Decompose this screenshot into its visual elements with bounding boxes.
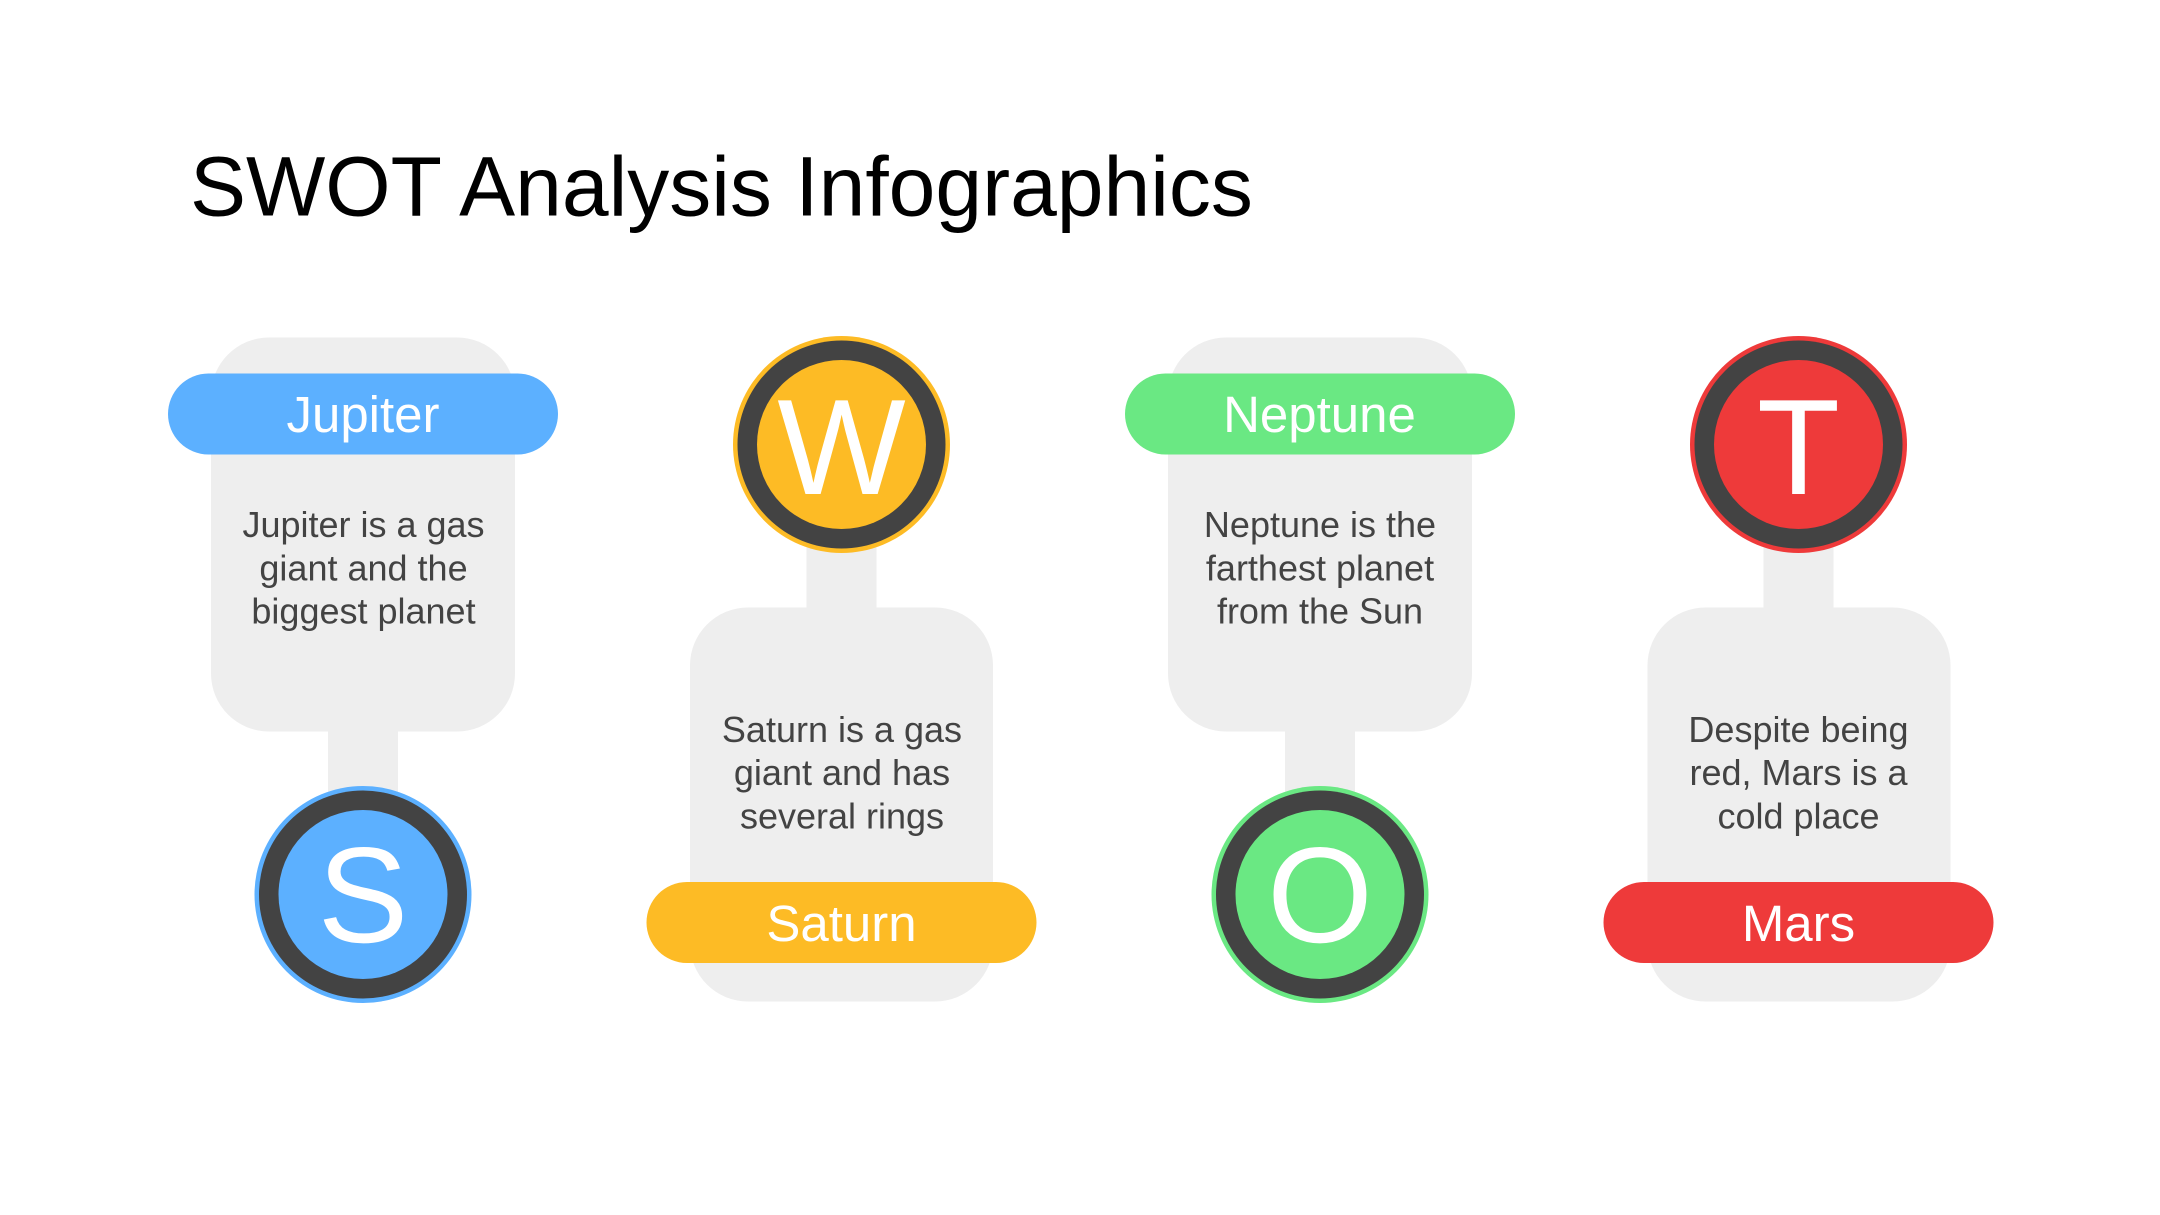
description: Neptune: Neptune is the [1204, 504, 1436, 545]
label pill: Neptune: Neptune [1223, 386, 1416, 443]
icon: letter T circle: T [1757, 371, 1840, 523]
label pill: Jupiter [168, 374, 558, 454]
icon: letter O circle [1212, 786, 1428, 1003]
description: Mars: red, Mars is a [1689, 752, 1909, 793]
label pill: Jupiter: Jupiter [286, 386, 440, 443]
icon: letter W circle: W [777, 371, 906, 523]
card: Saturn [690, 608, 993, 1002]
description: Neptune [1204, 504, 1436, 632]
card: Jupiter [211, 338, 515, 732]
icon: letter S circle [254, 786, 472, 1003]
description: Jupiter: giant and the [259, 548, 468, 588]
description: Jupiter: biggest planet [251, 590, 476, 632]
description: Jupiter [242, 504, 485, 632]
description: Saturn: giant and has [734, 752, 950, 793]
connector: T to Mars [1764, 542, 1834, 612]
panel: T Mars [1604, 336, 1994, 1002]
description: Mars: cold place [1717, 796, 1880, 836]
panel: W Saturn [646, 336, 1036, 1002]
panel: O Neptune [1125, 338, 1515, 1003]
description: Saturn [722, 709, 962, 836]
icon: letter S circle: S [318, 819, 408, 971]
description: Neptune: farthest planet [1206, 548, 1434, 588]
label pill: Mars [1604, 882, 1994, 963]
description: Saturn: several rings [740, 796, 944, 836]
icon: letter O circle: O [1267, 819, 1373, 971]
label pill: Neptune [1125, 374, 1515, 454]
panel: S Jupiter [168, 338, 558, 1003]
icon: letter T circle [1690, 336, 1907, 553]
card: Mars [1648, 608, 1950, 1002]
connector: Neptune to O [1285, 727, 1355, 797]
label pill: Saturn: Saturn [766, 895, 917, 952]
card: Neptune [1168, 338, 1472, 732]
label pill: Mars: Mars [1742, 895, 1855, 952]
label pill: Saturn [646, 882, 1036, 963]
description: Jupiter: Jupiter is a gas [242, 504, 485, 545]
icon: letter W circle [733, 336, 950, 553]
title: SWOT Analysis Infographics [190, 140, 1253, 234]
description: Saturn: Saturn is a gas [722, 709, 962, 750]
description: Mars: Despite being [1688, 709, 1909, 750]
connector: W to Saturn [806, 542, 876, 612]
connector: Jupiter to S [328, 727, 398, 797]
description: Neptune: from the Sun [1217, 590, 1423, 632]
description: Mars [1688, 709, 1909, 836]
